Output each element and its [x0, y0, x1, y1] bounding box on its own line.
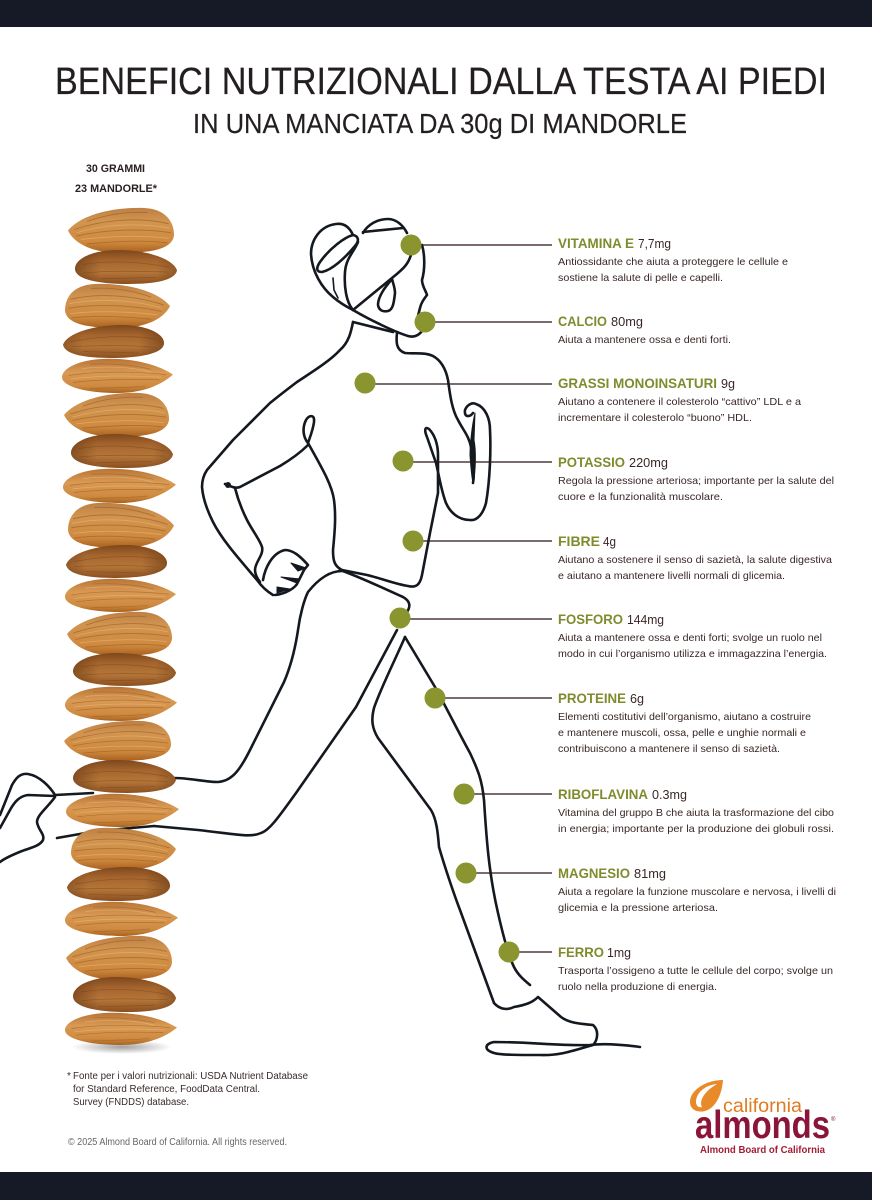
- torso and arms: [202, 322, 490, 595]
- logo: california almonds: [690, 1080, 836, 1156]
- serving label: 23 MANDORLE*: [75, 183, 158, 195]
- nutrient: proteine: contribuiscono a mantenere il senso di sazietà.: [558, 743, 780, 755]
- nutrient: proteine: 6g: [630, 691, 644, 706]
- nutrient: riboflavina: RIBOFLAVINA: [558, 786, 648, 802]
- nutrient: fosforo: Aiuta a mantenere ossa e denti forti; svolge un ruolo nel: [558, 632, 822, 644]
- footnote: Fonte per i valori nutrizionali: USDA Nutrient Database: [73, 1071, 308, 1082]
- nutrient: fibre: FIBRE: [558, 533, 600, 549]
- nutrient: potassio: [558, 454, 834, 503]
- nutrient: proteine: [558, 690, 811, 755]
- footnote: *: [67, 1071, 71, 1082]
- nutrient: fibre: Aiutano a sostenere il senso di sazietà, la salute digestiva: [558, 554, 832, 566]
- nutrient: grassi monoinsaturi: 9g: [721, 376, 735, 391]
- nutrient: calcio: [558, 313, 731, 346]
- nutrient: magnesio: glicemia e la pressione arteriosa.: [558, 902, 718, 914]
- bottom bar: [0, 1172, 872, 1200]
- nutrient: proteine: Elementi costitutivi dell’organismo, aiutano a costruire: [558, 711, 811, 723]
- nutrient: ferro: 1mg: [607, 945, 631, 960]
- logo: california almonds: almonds: [695, 1104, 830, 1147]
- nutrient: magnesio: MAGNESIO: [558, 865, 630, 881]
- marker: grassi monoinsaturi: [354, 372, 552, 394]
- nutrient: proteine: PROTEINE: [558, 690, 626, 706]
- nutrient: potassio: POTASSIO: [558, 454, 625, 470]
- nutrient: ferro: ruolo nella produzione di energia.: [558, 981, 717, 993]
- nutrient: calcio: Aiuta a mantenere ossa e denti forti.: [558, 334, 731, 346]
- marker: potassio: [392, 450, 552, 472]
- nutrient: magnesio: [558, 865, 836, 914]
- marker: calcio: [414, 312, 552, 332]
- nutrient: fibre: 4g: [603, 534, 616, 549]
- nutrient: fosforo: [558, 611, 827, 660]
- nutrient: grassi monoinsaturi: GRASSI MONOINSATURI: [558, 375, 717, 391]
- marker: riboflavina: [454, 784, 552, 804]
- logo: california almonds: california: [723, 1096, 802, 1117]
- nutrient: fosforo: FOSFORO: [558, 611, 623, 627]
- nutrient: vitamina E: VITAMINA E: [558, 235, 634, 251]
- nutrient: riboflavina: [558, 786, 834, 835]
- nutrient: calcio: 80mg: [611, 314, 643, 329]
- logo: california almonds: ®: [831, 1116, 836, 1123]
- logo: california almonds: Almond Board of California: [700, 1145, 825, 1156]
- top bar: [0, 0, 872, 27]
- nutrient: vitamina E: Antiossidante che aiuta a proteggere le cellule e: [558, 256, 788, 268]
- front leg and shoe: [372, 637, 640, 1055]
- nutrient: grassi monoinsaturi: Aiutano a contenere il colesterolo “cattivo” LDL e a: [558, 396, 801, 408]
- serving label: [75, 163, 158, 195]
- icon: almond leaf: [690, 1080, 723, 1112]
- nutrient: riboflavina: 0.3mg: [652, 787, 687, 802]
- nutrient: fibre: [558, 533, 832, 582]
- nutrient: grassi monoinsaturi: incrementare il colesterolo “buono” HDL.: [558, 412, 752, 424]
- subtitle: IN UNA MANCIATA DA 30g DI MANDORLE: [193, 108, 687, 139]
- nutrient: fosforo: 144mg: [627, 612, 664, 627]
- nutrient: potassio: Regola la pressione arteriosa; importante per la salute del: [558, 475, 834, 487]
- nutrient: vitamina E: [558, 235, 788, 284]
- nutrient: potassio: cuore e la funzionalità muscolare.: [558, 491, 723, 503]
- hair and head: [311, 219, 427, 337]
- nutrient: potassio: 220mg: [629, 455, 668, 470]
- nutrient: riboflavina: in energia; importante per la produzione dei globuli rossi.: [558, 823, 834, 835]
- nutrient: fosforo: modo in cui l’organismo utilizza e immagazzina l’energia.: [558, 648, 827, 660]
- nutrient: proteine: e mantenere muscoli, ossa, pelle e unghie normali e: [558, 727, 806, 739]
- copyright: © 2025 Almond Board of California. All rights reserved.: [68, 1137, 287, 1148]
- marker: fibre: [402, 530, 552, 552]
- nutrient: vitamina E: sostiene la salute di pelle e capelli.: [558, 272, 723, 284]
- nutrient: vitamina E: 7,7mg: [638, 236, 671, 251]
- serving label: 30 GRAMMI: [86, 163, 145, 175]
- marker: proteine: [424, 688, 552, 708]
- footnote: [67, 1071, 308, 1108]
- nutrient: magnesio: Aiuta a regolare la funzione muscolare e nervosa, i livelli di: [558, 886, 836, 898]
- nutrient: ferro: FERRO: [558, 944, 604, 960]
- nutrient: riboflavina: Vitamina del gruppo B che aiuta la trasformazione del cibo: [558, 807, 834, 819]
- footnote: Survey (FNDDS) database.: [73, 1097, 189, 1108]
- marker: fosforo: [390, 608, 552, 628]
- nutrient: grassi monoinsaturi: [558, 375, 801, 424]
- marker: vitamina E: [400, 234, 552, 256]
- nutrient: ferro: [558, 944, 833, 993]
- nutrient: magnesio: 81mg: [634, 866, 666, 881]
- nutrient: fibre: e aiutano a mantenere livelli normali di glicemia.: [558, 570, 785, 582]
- footnote: for Standard Reference, FoodData Central.: [73, 1084, 260, 1095]
- nutrient: calcio: CALCIO: [558, 313, 607, 329]
- running woman line drawing: [0, 219, 640, 1055]
- almond stack: [62, 208, 179, 1054]
- hips and rear leg: [0, 570, 409, 862]
- marker: magnesio: [456, 862, 552, 884]
- marker: ferro: [498, 942, 552, 962]
- nutrient: ferro: Trasporta l’ossigeno a tutte le cellule del corpo; svolge un: [558, 965, 833, 977]
